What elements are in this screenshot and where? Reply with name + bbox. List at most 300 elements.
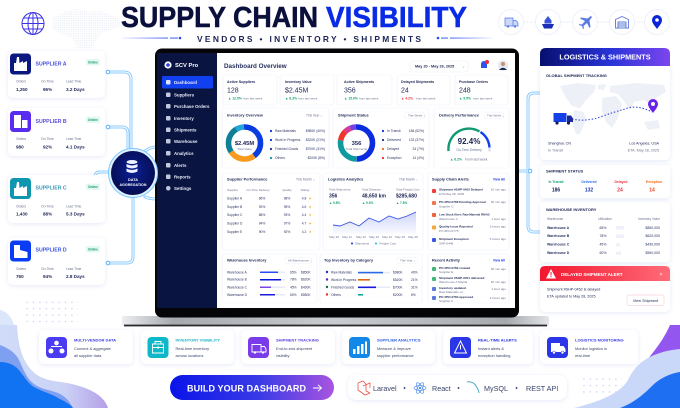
panel: supplier B: Online [88, 118, 98, 122]
panel: top inventory by category: $980K [393, 270, 403, 274]
KPI: active suppliers: ▲ 12.5% [228, 96, 242, 100]
feature: multi-vendor data: MULTI-VENDOR DATA [74, 338, 116, 342]
panel: supplier performance table: Supplier A [227, 196, 243, 200]
button: build your dashboard: BUILD YOUR DASHBOARD [187, 384, 306, 394]
panel: supplier A: Lead Time [66, 80, 82, 84]
panel: delayed shipment alert: DELAYED SHIPMENT ALERT [561, 272, 623, 277]
panel: shipment status: This Week ⌄ [408, 114, 425, 118]
panel: global shipment tracking: ETA: May 28, 2025 [628, 148, 659, 152]
feature: supplier analytics [342, 330, 435, 364]
feature: real-time alerts: Instant alerts & [478, 346, 504, 351]
panel: shipment status summary: 186 [552, 188, 560, 194]
icon: laravel [358, 381, 370, 395]
panel: shipment status summary [540, 165, 670, 198]
line chart: Shipments [355, 242, 370, 246]
panel: shipment status: 356 [352, 141, 362, 147]
panel: warehouse inventory: 45% [290, 286, 297, 290]
panel: supplier performance table: 92% [284, 230, 290, 234]
KPI: inventory value [280, 75, 334, 105]
KPI: active shipments: 356 [344, 88, 356, 94]
panel: warehouse inventory table: Utilization [598, 217, 612, 221]
feature: real-time alerts [443, 330, 533, 364]
sidebar: Suppliers [174, 92, 195, 98]
panel: logistics analytics: Total Shipments [329, 188, 351, 192]
panel: supplier A: Orders [16, 80, 26, 84]
title: VISIBILITY [326, 2, 467, 34]
panel: recent activity: Recent Activity [432, 258, 461, 262]
panel: shipment status summary: Delayed [614, 180, 628, 184]
panel: supplier performance table: 94% [259, 222, 265, 226]
line chart: May 24 [382, 235, 392, 239]
feature: inventory visibility: across locations [176, 353, 203, 358]
KPI: active suppliers: from last week [243, 96, 263, 100]
panel: supplier performance table: Supplier B [227, 205, 243, 209]
panel: supplier performance table: Supplier D [227, 222, 243, 226]
KPI: delayed shipments: 24 [401, 88, 409, 94]
line chart: Freight Cost [380, 242, 396, 246]
line chart: May 20 [329, 235, 339, 239]
KPI: purchase orders: 248 [459, 88, 471, 94]
panel: supplier performance table: ★ [309, 230, 312, 234]
panel: warehouse inventory table: $550,000 [645, 251, 660, 255]
panel: delayed shipment alert: × [659, 272, 663, 278]
panel: recent activity: PO #PO-0782 created [439, 266, 470, 270]
panel: warehouse inventory: Warehouse A [227, 270, 247, 274]
panel: supplier performance table: 4.2 [302, 230, 306, 234]
panel: warehouse inventory table: Inventory Value [638, 217, 660, 221]
donut chart: inventory [228, 127, 260, 159]
panel: supplier A: SUPPLIER A [36, 62, 67, 68]
icon: bar analytics [349, 337, 370, 358]
panel: delayed shipment alert [540, 266, 670, 312]
panel: supplier A: 1,250 [16, 87, 28, 92]
KPI: active suppliers: 128 [227, 88, 239, 94]
icon: ship [536, 10, 560, 34]
world map [560, 83, 666, 134]
panel: shipment status: Total Shipments [346, 147, 368, 151]
date picker: May 20 - May 26, 2025 [415, 65, 454, 69]
KPI: active shipments [337, 75, 392, 105]
route line [572, 107, 652, 120]
feature: multi-vendor data: all supplier data [74, 353, 102, 358]
panel: warehouse inventory table: Warehouse B [547, 234, 570, 238]
panel: recent activity: Shipment #SHP-0451 delivered [439, 276, 485, 280]
line chart: May 21 [342, 235, 352, 239]
panel: top inventory by category: 31% [411, 286, 418, 290]
panel: supplier D: Orders [16, 267, 26, 271]
panel: supplier performance table: 92% [259, 205, 265, 209]
icon: location pin [644, 10, 670, 34]
feature: inventory visibility: Real-time inventory [176, 346, 209, 351]
panel: logistics analytics: 356 [329, 194, 338, 200]
panel: top inventory by category: $200K [393, 293, 403, 297]
panel: shipment status: 186 (52%) [409, 129, 424, 133]
panel: supplier performance table: 93% [284, 213, 290, 217]
panel: inventory overview: Finished Goods [275, 147, 298, 151]
icon: react [414, 382, 426, 394]
panel: warehouse inventory table: $430,000 [645, 242, 660, 246]
panel: top inventory by category: Raw Materials [331, 270, 352, 274]
panel: supply chain alerts: View All [493, 178, 505, 182]
line chart: May 22 [356, 235, 366, 239]
connectors to data hub [95, 70, 157, 265]
feature: multi-vendor data: Connect & aggregate [74, 346, 111, 351]
panel: delivery performance [434, 108, 509, 168]
panel: supplier performance table: 88% [259, 213, 265, 217]
icon: alert bell [450, 337, 471, 358]
panel: inventory overview: Total Value [237, 147, 252, 151]
panel: inventory overview: Others [275, 156, 285, 160]
panel: supplier performance table: 4.4 [302, 213, 306, 217]
icon: database [126, 160, 138, 173]
sidebar: Reports [174, 174, 191, 180]
line chart: May 23 [369, 235, 379, 239]
panel: inventory overview: Work In Progress [275, 138, 301, 142]
feature: logistics monitoring: real-time [575, 353, 590, 358]
panel: supplier A: On-Time [41, 80, 54, 84]
panel: shipment status: Shipment Status [338, 112, 369, 118]
panel: delivery performance: 92.4% [458, 137, 480, 146]
panel: supply chain alerts: Quality Issue Reported [439, 224, 473, 228]
panel: logistics analytics: ▲ 7.8% [396, 201, 407, 205]
panel: shipment status summary: Delivered [581, 180, 597, 184]
panel: logistics analytics: ▲ 9.8% [329, 201, 340, 205]
KPI: delayed shipments: from last week [416, 96, 436, 100]
panel: shipment status: Delayed [387, 147, 399, 151]
panel: logistics analytics: Total Distance [362, 188, 381, 192]
KPI: inventory value: ▲ 8.3% [285, 96, 297, 100]
panel: supplier performance table: 4.8 [302, 196, 306, 200]
panel: supplier performance table: On-Time Delivery [246, 188, 270, 192]
icon: globe [22, 12, 44, 34]
icon: network [46, 337, 67, 358]
panel: supply chain alerts: SHP-0448 [439, 242, 454, 246]
panel: supply chain alerts: Low Stock Alert: Raw Material RM-02 [439, 212, 490, 216]
panel: shipment status summary: SHIPMENT STATUS [546, 168, 584, 174]
KPI: delayed shipments [397, 75, 450, 105]
panel: supplier D: Online [88, 248, 98, 252]
feature: inventory visibility [141, 330, 234, 364]
tech stack pill: React [432, 384, 451, 393]
laptop base [122, 316, 549, 326]
panel: shipment status: Delivered [387, 138, 401, 142]
panel: inventory overview: $700K (31%) [306, 147, 325, 151]
panel: supply chain alerts: Supply Chain Alerts [432, 176, 469, 182]
panel: supplier C: 1,430 [16, 212, 28, 216]
panel: warehouse inventory table: 45% [599, 242, 607, 246]
panel: supplier C: Orders [16, 204, 26, 208]
KPI: delayed shipments: Delayed Shipments [401, 80, 434, 84]
panel: recent activity: 30 min ago [491, 267, 506, 271]
tech stack pill [348, 375, 567, 400]
panel: supplier performance table: 97% [284, 222, 290, 226]
panel: logistics analytics: Logistics Analytics [328, 176, 363, 182]
panel: supply chain alerts: Shipment Exception [439, 237, 469, 241]
donut chart: shipments [340, 127, 372, 159]
panel: top inventory by category: Work in Progress [331, 278, 357, 282]
panel: supplier performance table: This Month ⌄ [296, 178, 315, 182]
feature: shipment tracking: visibility [276, 353, 289, 358]
icon: warehouse [610, 10, 634, 34]
panel: supply chain alerts: PO #PO-0786 Pending Approval [439, 200, 486, 204]
KPI: delayed shipments: ▲ 4.2% [401, 96, 413, 100]
panel: recent activity: PO #PO-0784 approved [439, 295, 473, 299]
panel: supplier D: SUPPLIER D [36, 248, 67, 254]
panel: warehouse inventory table: Warehouse [547, 217, 563, 221]
feature: shipment tracking: SHIPMENT TRACKING [276, 338, 319, 342]
sidebar: Shipments [174, 128, 197, 132]
panel: recent activity: Warehouse A Manila [439, 280, 468, 284]
panel: delivery performance: From last week [465, 158, 488, 162]
panel: warehouse inventory: $550K [301, 293, 311, 297]
laptop [155, 48, 519, 318]
KPI: active suppliers: Active Suppliers [227, 80, 255, 84]
panel: inventory overview: This Year ⌄ [306, 114, 323, 118]
icon: factory A [10, 54, 31, 74]
panel: supplier performance table: Supplier E [227, 230, 243, 234]
panel: supplier performance table: Supplier [227, 188, 238, 192]
icon: monitoring truck [547, 337, 568, 358]
KPI: inventory value: from last week [298, 96, 318, 100]
panel: supplier performance table: 90% [259, 230, 265, 234]
panel: supplier B: SUPPLIER B [36, 119, 67, 125]
sidebar: Settings [174, 186, 192, 191]
panel: recent activity: Supplier A [439, 299, 454, 303]
panel: inventory overview [222, 108, 329, 168]
panel: shipment status: In Transit [387, 129, 401, 133]
panel: top inventory by category: $520K [393, 278, 403, 282]
data aggregation hub: AGGREGATION [120, 183, 147, 187]
panel: warehouse inventory: Warehouse B [227, 278, 248, 282]
panel: supplier B: Lead Time [66, 137, 82, 141]
icon: tracking truck [248, 337, 269, 358]
panel: supply chain alerts: 10 min ago [491, 188, 506, 192]
data aggregation hub: DATA [128, 178, 138, 182]
decorative dot grid left [23, 298, 78, 324]
feature: supplier analytics: SUPPLIER ANALYTICS [377, 338, 421, 342]
feature: logistics monitoring [540, 330, 638, 364]
sidebar: Analytics [174, 151, 194, 156]
panel: inventory overview: $980K (40%) [306, 129, 325, 133]
panel: supplier C: Online [88, 185, 98, 189]
panel: warehouse inventory table: 65% [599, 226, 607, 230]
panel: supplier A: Online [88, 61, 98, 65]
panel: delayed shipment alert: ETA updated to May 28, 2025 [547, 294, 596, 298]
icon: truck [498, 10, 524, 34]
panel: supplier C: SUPPLIER C [36, 186, 67, 192]
panel: supplier C: 5.3 Days [66, 212, 85, 216]
panel: supplier B: 92% [43, 144, 52, 150]
panel: global shipment tracking [540, 66, 670, 160]
feature: logistics monitoring: Monitor logistics in [575, 346, 607, 351]
icon: building B [10, 111, 31, 132]
REST API label: REST API [526, 384, 558, 393]
KPI: inventory value: Inventory Value [285, 80, 312, 84]
panel: warehouse inventory: 65% [290, 270, 297, 274]
KPI: purchase orders: ▲ 9.5% [459, 96, 471, 100]
panel: shipment status summary: 14 [649, 188, 655, 194]
icon: warning triangle [546, 269, 556, 278]
panel: warehouse inventory table: $620,000 [645, 234, 660, 238]
feature: real-time alerts: REAL-TIME ALERTS [478, 338, 517, 342]
corner wave: bottom right [574, 325, 680, 408]
title [121, 2, 467, 34]
panel: top inventory by category: Others [331, 293, 341, 297]
panel: supplier B [8, 108, 105, 156]
panel: supply chain alerts: PO #PO-0775 [439, 229, 459, 233]
sidebar: Inventory [174, 116, 194, 121]
panel: logistics analytics: Total Freight Cost [396, 188, 420, 192]
panel: recent activity: View All [493, 258, 505, 262]
feature: logistics monitoring: LOGISTICS MONITORING [575, 338, 624, 342]
panel: global shipment tracking: GLOBAL SHIPMENT TRACKING [546, 73, 607, 78]
panel: recent activity [428, 254, 509, 303]
panel: warehouse inventory table: Warehouse C [547, 242, 570, 246]
panel: logistics and shipments header [540, 48, 670, 66]
logistics icon row [498, 10, 670, 34]
panel: inventory overview: $200K (8%) [308, 156, 325, 160]
panel: warehouse inventory table: Warehouse D [547, 251, 570, 255]
panel: supply chain alerts: 30 min ago [491, 200, 506, 204]
panel: supplier performance table: ★ [309, 222, 312, 226]
panel: inventory overview: $2.45M [235, 141, 254, 147]
icon: mysql [467, 382, 479, 393]
feature: supplier analytics: Measure & improve [377, 346, 411, 351]
sidebar: Purchase Orders [174, 104, 210, 109]
panel: top inventory by category: $700K [393, 286, 403, 290]
panel: global shipment tracking: Los Angeles, USA [629, 142, 660, 146]
panel: supplier performance table: 4.6 [302, 205, 306, 209]
panel: supplier D: 2.8 Days [66, 274, 85, 279]
sidebar: Warehouse [174, 139, 198, 144]
corner wave: bottom left [0, 310, 108, 408]
feature: multi-vendor data [39, 330, 133, 364]
sidebar: Alerts [174, 163, 187, 168]
panel: supply chain alerts: ETA May 28, 2025 [439, 192, 465, 196]
line chart: May 25 [395, 235, 405, 239]
panel: supplier D [8, 238, 105, 285]
feature: shipment tracking [242, 330, 335, 364]
panel: supply chain alerts [428, 173, 509, 250]
panel: shipment status: Exception [387, 156, 402, 160]
feature: real-time alerts: exception handling [478, 353, 510, 358]
panel: warehouse inventory: 60% [290, 293, 297, 297]
notification bell [481, 60, 489, 68]
panel: recent activity: 2 hours ago [490, 296, 506, 300]
panel: logistics analytics: $285,680 [396, 194, 417, 200]
panel: supplier performance table: Supplier C [227, 213, 243, 217]
panel: warehouse inventory: Warehouse C [227, 286, 248, 290]
icon: plane [572, 10, 598, 34]
panel: supplier A: 96% [43, 87, 52, 92]
panel: supplier performance table: ★ [309, 205, 312, 209]
icon: destination pin [648, 99, 658, 113]
KPI: active suppliers [223, 75, 277, 105]
KPI: purchase orders [455, 75, 508, 105]
panel: supplier performance table [222, 173, 320, 250]
feature: shipment tracking: End-to-end shipment [276, 346, 313, 351]
connectors to right panel [519, 93, 540, 232]
panel: supplier C: On-Time [41, 204, 54, 208]
panel: supplier A [8, 51, 105, 98]
panel: top inventory by category: 40% [411, 270, 418, 274]
panel: supplier performance table: 98% [284, 196, 290, 200]
panel: global shipment tracking: In Transit [548, 148, 563, 152]
panel: warehouse inventory: $430K [301, 286, 311, 290]
panel: warehouse inventory table: $850,000 [645, 226, 660, 230]
decorative globe dot map [52, 9, 122, 49]
panel: supply chain alerts: 5 hours ago [490, 237, 506, 241]
button: view shipment: View Shipment [633, 299, 659, 303]
tech stack pill: Laravel [373, 384, 397, 393]
panel: shipment status [333, 108, 429, 168]
panel: supplier D: Lead Time [66, 267, 82, 271]
panel: logistics analytics [323, 173, 423, 250]
KPI: purchase orders: Purchase Orders [459, 80, 488, 84]
panel: top inventory by category: Top Inventory by Category [324, 258, 374, 262]
panel: warehouse inventory table: 78% [599, 234, 607, 238]
panel: supply chain alerts: Warehouse C [439, 217, 459, 221]
KPI: inventory value: $2.45M [285, 88, 309, 94]
gauge chart [448, 129, 490, 152]
panel: supplier C: Lead Time [66, 204, 82, 208]
title: SUPPLY CHAIN [121, 2, 318, 34]
feature: supplier analytics: supplier performance [377, 353, 414, 358]
panel: warehouse inventory table: WAREHOUSE INVENTORY [546, 207, 597, 212]
KPI: purchase orders: from last week [473, 96, 493, 100]
feature: inventory visibility: INVENTORY VISIBILITY [176, 338, 220, 342]
panel: supplier performance table: 4.7 [302, 222, 306, 226]
panel: warehouse inventory: Warehouse Inventory [227, 258, 267, 262]
date picker: ⌄ [462, 65, 465, 69]
panel: supplier performance table: ★ [309, 213, 312, 217]
panel: logistics analytics: This Month ⌄ [399, 178, 418, 182]
panel: supplier performance table: Rating [301, 188, 310, 192]
panel: recent activity: Inventory updated [439, 286, 466, 290]
panel: supplier D: 94% [43, 274, 52, 279]
panel: inventory overview: Raw Materials [275, 129, 296, 133]
panel: warehouse inventory: 78% [290, 278, 297, 282]
panel: warehouse inventory: $620K [301, 278, 311, 282]
panel: supply chain alerts: Supplier C [439, 204, 454, 208]
panel: warehouse inventory table [540, 202, 670, 262]
panel: supply chain alerts: 1 hour ago [491, 217, 506, 221]
panel: top inventory by category: Finished Goods [331, 286, 354, 290]
icon: inventory box [148, 337, 168, 358]
panel: warehouse inventory [222, 254, 317, 303]
panel: shipment status: 132 (37%) [409, 138, 424, 142]
panel: delivery performance: This Week ⌄ [487, 114, 504, 118]
panel: shipment status: 14 (4%) [412, 156, 424, 160]
panel: recent activity: 1 hour ago [491, 287, 506, 291]
panel: supply chain alerts: Shipment #SHP-0452 Delayed [439, 188, 483, 192]
panel: inventory overview: $320K (21%) [306, 138, 325, 142]
panel: supplier performance table: Supplier Performance [227, 176, 268, 182]
subtitle: VENDORS • INVENTORY • SHIPMENTS [197, 34, 421, 44]
panel: warehouse inventory: $850K [301, 270, 311, 274]
panel: top inventory by category: This Year ⌄ [400, 259, 416, 263]
tech stack pill: MySQL [484, 384, 508, 393]
panel: supplier D: On-Time [41, 267, 54, 271]
panel: supplier C: 88% [43, 212, 52, 216]
sidebar: Dashboard [174, 80, 197, 85]
data aggregation hub [108, 148, 158, 198]
panel: delivery performance: Delivery Performance [439, 112, 480, 118]
dashboard heading: Dashboard Overview [224, 63, 287, 70]
panel: shipment status summary: Exception [646, 180, 662, 184]
panel: supplier B: 4.1 Days [66, 144, 85, 150]
panel: delivery performance: ▲ 6.2% [450, 158, 462, 162]
